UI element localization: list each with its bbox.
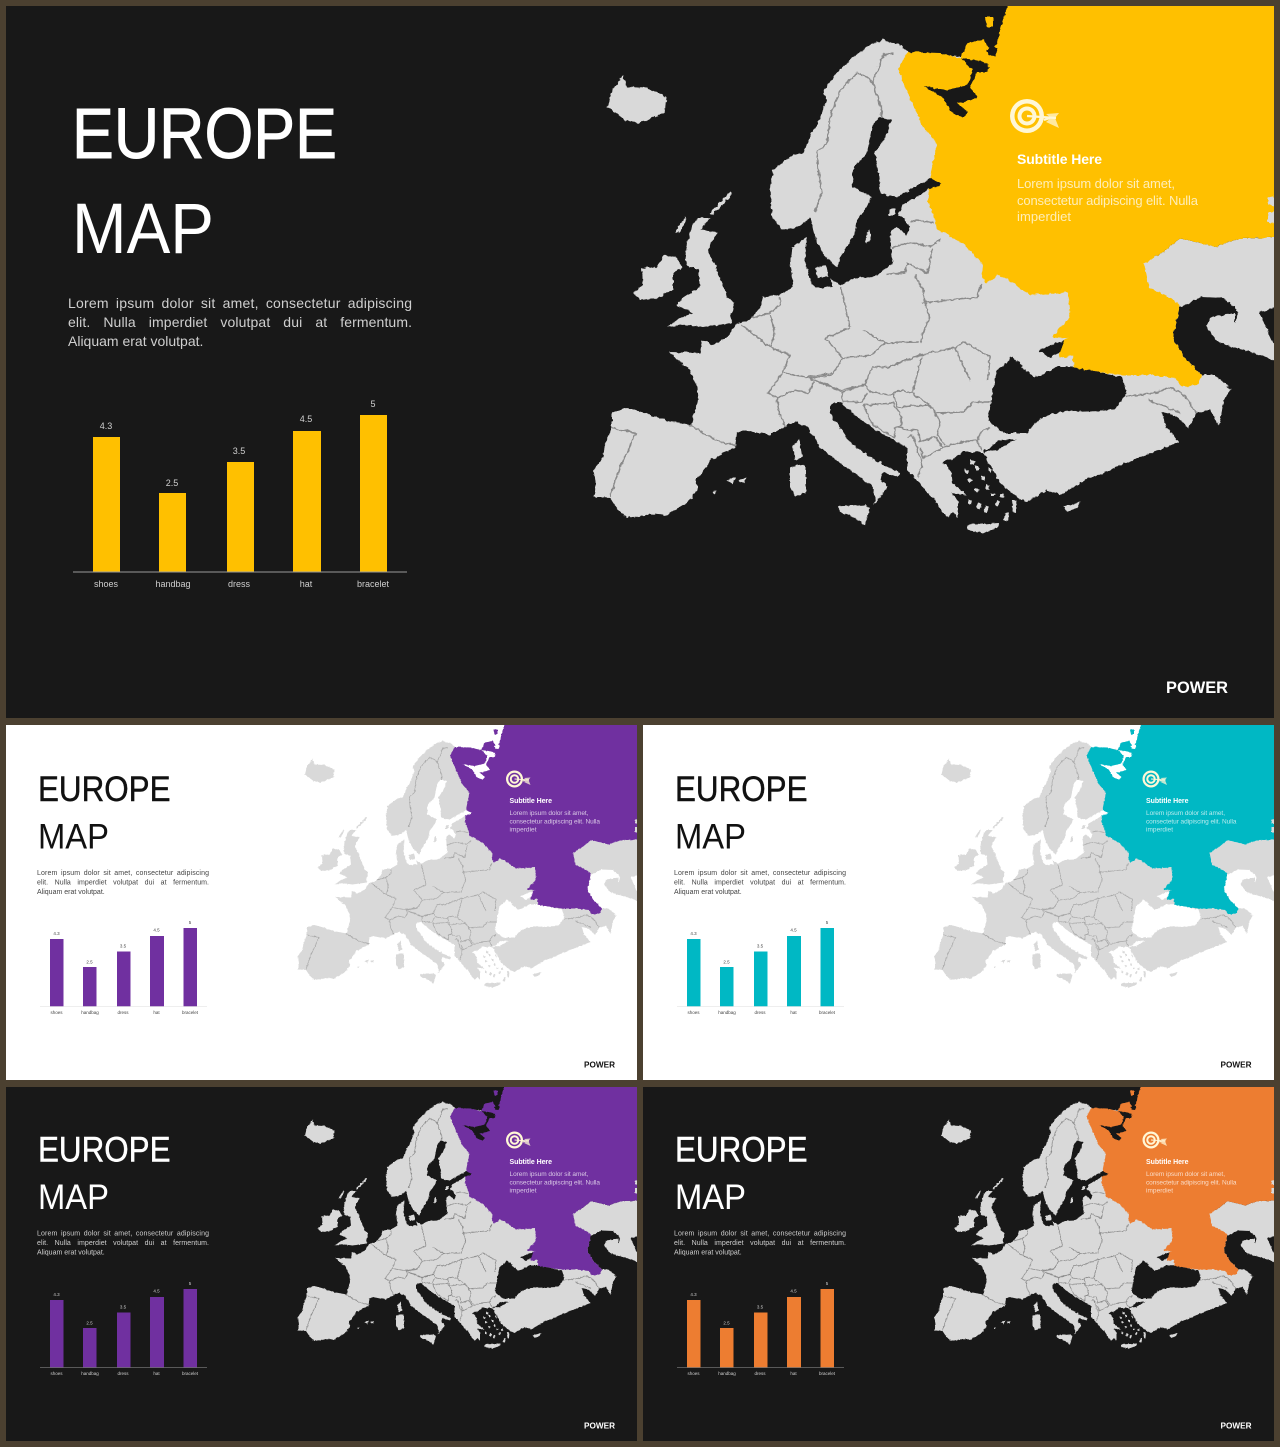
title <box>40 776 170 848</box>
bar chart: 5 <box>826 920 829 925</box>
bar chart: handbag <box>718 1371 736 1376</box>
bar chart <box>40 920 207 1015</box>
bar chart: 2.5 <box>166 478 178 488</box>
map: Europe with Russia highlighted <box>594 0 1280 533</box>
bar chart: 2.5 <box>723 1320 730 1326</box>
panel: white purple slide <box>6 716 646 1080</box>
text block: Aliquam erat volutpat. <box>68 333 203 349</box>
bar chart: 4.5 <box>153 928 160 932</box>
callout: imperdiet <box>1146 826 1173 834</box>
callout: imperdiet <box>510 826 537 834</box>
title: MAP <box>72 190 214 269</box>
bar chart: 3.5 <box>757 1304 764 1310</box>
text block: Lorem ipsum dolor sit amet, consectetur adipiscing <box>674 870 846 877</box>
text block: Lorem ipsum dolor sit amet, consectetur adipiscing <box>37 1230 209 1238</box>
callout <box>1146 1159 1237 1194</box>
callout: Subtitle Here <box>1146 1159 1189 1166</box>
text block: Lorem ipsum dolor sit amet, consectetur adipiscing <box>674 1230 846 1238</box>
callout: consectetur adipiscing elit. Nulla <box>1146 818 1237 826</box>
text block: elit. Nulla imperdiet volutpat dui at fermentum. <box>68 314 412 330</box>
text block: elit. Nulla imperdiet volutpat dui at fermentum. <box>37 1240 209 1247</box>
panel: white teal slide <box>643 716 1280 1080</box>
callout: Lorem ipsum dolor sit amet, <box>1017 176 1175 191</box>
callout: imperdiet <box>510 1188 537 1194</box>
bar chart <box>677 920 844 1015</box>
bar chart <box>73 399 407 589</box>
map: Europe purple <box>298 716 646 988</box>
text block: Aliquam erat volutpat. <box>674 889 742 896</box>
callout <box>510 1159 600 1194</box>
text block <box>68 295 412 349</box>
bar chart: 2.5 <box>723 960 730 964</box>
callout: consectetur adipiscing elit. Nulla <box>510 818 600 826</box>
map: Europe purple on dark <box>298 1077 646 1348</box>
icon: target with arrow <box>1142 1132 1167 1148</box>
bar chart: bracelet <box>182 1371 199 1376</box>
callout <box>510 798 600 834</box>
callout: Lorem ipsum dolor sit amet, <box>1146 1171 1225 1178</box>
callout: consectetur adipiscing elit. Nulla <box>1146 1180 1237 1186</box>
icon: target with arrow <box>1010 99 1059 133</box>
brand label: POWER <box>1220 1060 1252 1070</box>
bar chart: 4.5 <box>153 1288 160 1294</box>
bar chart: 2.5 <box>86 960 93 964</box>
callout: Subtitle Here <box>510 798 552 805</box>
bar chart: bracelet <box>819 1371 836 1376</box>
text block: elit. Nulla imperdiet volutpat dui at fermentum. <box>674 1240 846 1247</box>
bar chart: 5 <box>189 1281 192 1286</box>
callout: Lorem ipsum dolor sit amet, <box>510 1171 589 1178</box>
title <box>677 1136 806 1209</box>
bar chart: bracelet <box>819 1010 836 1015</box>
bar chart: hat <box>790 1010 797 1015</box>
bar chart: 5 <box>189 920 192 925</box>
text block: elit. Nulla imperdiet volutpat dui at fermentum. <box>674 880 846 886</box>
callout: imperdiet <box>1017 209 1071 224</box>
icon: target with arrow <box>506 770 530 788</box>
icon: target with arrow <box>506 1132 530 1148</box>
callout: Lorem ipsum dolor sit amet, <box>1146 810 1225 817</box>
text block <box>674 870 846 896</box>
bar chart: hat <box>300 579 313 589</box>
title: EUROPE <box>38 769 170 809</box>
bar chart: 4.3 <box>53 931 60 936</box>
bar chart: shoes <box>94 579 119 589</box>
bar chart: dress <box>228 579 250 589</box>
bar chart: hat <box>790 1371 797 1376</box>
title: MAP <box>675 1177 746 1217</box>
callout: imperdiet <box>1146 1188 1173 1194</box>
text block: Lorem ipsum dolor sit amet, consectetur adipiscing <box>68 295 412 311</box>
map: Europe orange on dark <box>934 1077 1280 1348</box>
bar chart: handbag <box>81 1371 99 1376</box>
callout: Lorem ipsum dolor sit amet, <box>510 810 589 817</box>
bar chart: bracelet <box>357 579 390 589</box>
brand label: POWER <box>584 1420 615 1430</box>
brand label: POWER <box>1166 678 1228 697</box>
bar chart: handbag <box>718 1010 736 1015</box>
bar chart: dress <box>117 1371 129 1376</box>
bar chart: 2.5 <box>86 1320 93 1326</box>
bar chart: dress <box>754 1010 766 1015</box>
bar chart <box>677 1281 844 1376</box>
bar chart: 3.5 <box>233 446 245 456</box>
callout: Subtitle Here <box>1146 798 1189 805</box>
bar chart: bracelet <box>182 1010 199 1015</box>
title: EUROPE <box>675 1130 808 1170</box>
callout <box>1146 798 1237 834</box>
bar chart: shoes <box>50 1010 63 1015</box>
bar chart: shoes <box>687 1010 700 1015</box>
callout: Subtitle Here <box>510 1159 552 1166</box>
bar chart: handbag <box>155 579 191 589</box>
title: MAP <box>38 816 109 856</box>
callout: Subtitle Here <box>1017 151 1102 167</box>
title <box>76 108 335 254</box>
bar chart: 4.3 <box>690 1292 697 1297</box>
bar chart: 4.3 <box>690 931 697 936</box>
bar chart: 5 <box>370 399 376 409</box>
text block <box>37 1230 209 1256</box>
text block <box>37 870 209 896</box>
bar chart: 3.5 <box>120 1304 127 1310</box>
text block: elit. Nulla imperdiet volutpat dui at fermentum. <box>37 880 209 886</box>
text block: Aliquam erat volutpat. <box>37 889 105 896</box>
text block: Aliquam erat volutpat. <box>674 1250 742 1256</box>
icon: target with arrow <box>1142 770 1167 788</box>
bar chart: shoes <box>687 1371 700 1376</box>
bar chart <box>40 1281 207 1376</box>
title: MAP <box>675 816 746 856</box>
callout <box>1017 151 1199 224</box>
brand label: POWER <box>1220 1420 1252 1430</box>
panel: large dark yellow slide <box>6 0 1280 718</box>
bar chart: shoes <box>50 1371 63 1376</box>
bar chart: handbag <box>81 1010 99 1015</box>
title: EUROPE <box>38 1130 170 1170</box>
bar chart: 3.5 <box>120 944 127 948</box>
callout: consectetur adipiscing elit. Nulla <box>1017 193 1199 208</box>
panel: dark purple slide <box>6 1077 646 1441</box>
title <box>677 776 806 848</box>
title <box>40 1136 170 1209</box>
bar chart: 4.3 <box>53 1292 60 1297</box>
bar chart: hat <box>153 1371 160 1376</box>
bar chart: dress <box>117 1010 129 1015</box>
brand label: POWER <box>584 1060 615 1070</box>
text block: Aliquam erat volutpat. <box>37 1250 105 1256</box>
title: EUROPE <box>675 769 808 809</box>
map: Europe teal <box>934 716 1280 988</box>
panel: dark orange slide <box>643 1077 1280 1441</box>
bar chart: dress <box>754 1371 766 1376</box>
text block <box>674 1230 846 1256</box>
bar chart: 4.3 <box>100 421 112 431</box>
text block: Lorem ipsum dolor sit amet, consectetur adipiscing <box>37 870 209 877</box>
title: MAP <box>38 1177 109 1217</box>
callout: consectetur adipiscing elit. Nulla <box>510 1180 600 1186</box>
bar chart: 5 <box>826 1281 829 1286</box>
bar chart: 4.5 <box>300 414 312 424</box>
bar chart: hat <box>153 1010 160 1015</box>
title: EUROPE <box>72 95 337 174</box>
bar chart: 4.5 <box>790 928 797 932</box>
bar chart: 4.5 <box>790 1288 797 1294</box>
bar chart: 3.5 <box>757 944 764 948</box>
